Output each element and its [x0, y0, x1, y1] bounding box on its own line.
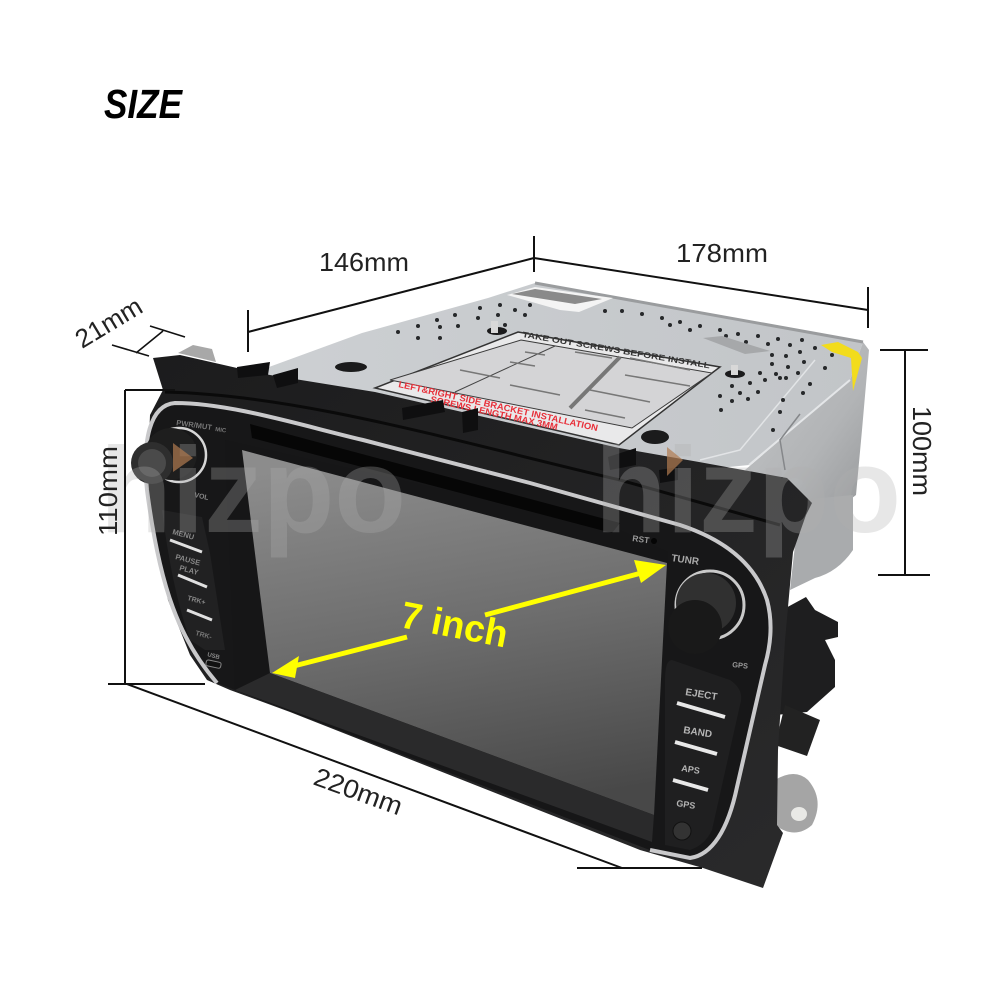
dimension: 178mm: 178mm [676, 238, 768, 268]
gray tab behind top corner [178, 345, 216, 362]
watermark right: hizpo [595, 422, 901, 558]
panel button labels: PWR/MUT [176, 418, 213, 432]
black lower block [775, 705, 820, 756]
panel button labels: BAND [683, 725, 713, 740]
title: SIZE [104, 81, 183, 127]
dimension: 21mm: 21mm [70, 291, 148, 354]
dimension: 146mm: 146mm [319, 247, 409, 277]
device: front panel [131, 345, 812, 888]
arrow: screen diagonal lower-left [272, 637, 407, 678]
label: 7 inch: 7 inch [397, 595, 511, 656]
silver bezel trim [146, 403, 771, 858]
right button group [665, 660, 741, 850]
left button group [162, 510, 225, 669]
silver mounting tab [775, 774, 818, 832]
dimension: 110mm [93, 390, 205, 684]
watermark left: hizpo [100, 422, 406, 558]
clips on top edge [237, 362, 678, 483]
chassis side panel [745, 342, 869, 515]
panel button labels: PAUSE [174, 552, 201, 567]
panel button labels: RST [632, 533, 651, 545]
chassis top plate [250, 283, 863, 470]
reset hole [651, 538, 657, 544]
lower screen frame [235, 673, 654, 842]
installation label: LEFT&RIGHT SIDE BRACKET INSTALLATION [398, 379, 599, 433]
device: metal chassis [250, 283, 869, 515]
panel button labels: USB [206, 652, 221, 661]
dimension: 21mm [70, 291, 185, 356]
panel button labels: VOL [194, 492, 210, 502]
panel button labels: GPS [676, 798, 696, 811]
dimension: 110mm: 110mm [93, 446, 123, 536]
yellow warning sticker [821, 342, 862, 391]
black clip bracket [775, 597, 838, 715]
dimension: 100mm [878, 350, 937, 575]
panel button labels: MENU [171, 527, 195, 542]
left volume knob [131, 428, 206, 484]
installation label: TAKE OUT SCREWS BEFORE INSTALL [522, 330, 711, 370]
arrow: screen diagonal upper-right [485, 560, 666, 615]
CD slot [250, 424, 620, 533]
panel button labels: EJECT [685, 687, 718, 703]
dimension: 220mm: 220mm [310, 761, 407, 821]
panel button labels: TRK- [194, 630, 213, 641]
panel button labels: PLAY [178, 563, 199, 577]
barcode sticker [507, 287, 613, 312]
installation label: SCREWS LENGTH MAX 3MM [430, 394, 559, 432]
mounting holes and screws [335, 321, 770, 444]
upper silver bracket [790, 495, 853, 590]
panel button labels: GPS [732, 660, 748, 671]
device: side brackets [775, 495, 853, 832]
panel button labels: TUNR [671, 553, 700, 568]
right tuner knob [668, 571, 744, 654]
panel button labels [171, 418, 748, 811]
dimension: 146mm [248, 236, 534, 352]
installation label [375, 330, 720, 445]
panel button labels: TRK+ [186, 595, 206, 607]
panel button labels: MIC [215, 427, 227, 435]
screen [242, 450, 667, 815]
screen surround [225, 440, 668, 850]
front panel body [147, 355, 812, 888]
dimension: 100mm: 100mm [907, 406, 937, 496]
panel button labels: APS [681, 763, 701, 776]
dimension: 220mm [127, 684, 702, 868]
dimension: 178mm [534, 238, 868, 328]
ventilation holes [396, 303, 834, 432]
